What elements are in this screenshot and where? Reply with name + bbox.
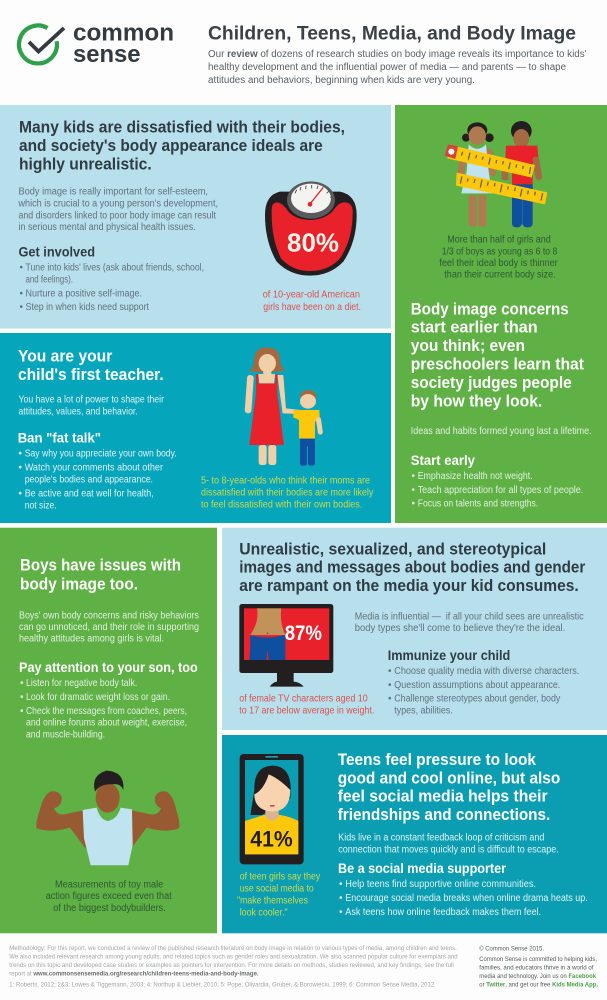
tips list xyxy=(20,263,204,313)
kids caption: than their current body size. xyxy=(444,270,556,281)
tips list: people's bodies and appearance. xyxy=(25,475,153,486)
methodology: 1: Roberts, 2012; 2&3: Lowes & Tiggemann, 2003; 4: Northup & Liebler, 2010; 5: Pope, Olivardia, Gruber, & Borowiecki, 1999; 6: Common Sense Media, 2012 xyxy=(9,981,435,988)
heading: Teens feel pressure to look xyxy=(338,750,536,769)
man caption: Measurements of toy male xyxy=(55,879,164,890)
heading: Body image concerns xyxy=(411,299,569,318)
tips list: • xyxy=(339,893,343,904)
subheading: immunize your child: Immunize your child xyxy=(388,647,510,663)
icon: TV with 87% xyxy=(239,604,333,687)
tips list: Listen for negative body talk. xyxy=(26,678,137,689)
body text: can go unnoticed, and their role in supporting xyxy=(19,622,199,633)
tips list xyxy=(412,471,583,510)
body text xyxy=(18,186,218,233)
TV caption: to 17 are below average in weight. xyxy=(239,705,374,716)
tips list: Nurture a positive self-image. xyxy=(26,288,142,299)
heading xyxy=(338,750,560,824)
body text: Media is influential — if all your child sees are unrealistic xyxy=(355,611,584,622)
heading: feel social media helps their xyxy=(338,787,548,806)
body text: Body image is really important for self-esteem, xyxy=(18,186,208,197)
tips list: • xyxy=(388,666,392,677)
heading: Unrealistic, sexualized, and stereotypical xyxy=(239,540,546,558)
tips list: not size. xyxy=(25,501,57,512)
icon: bathroom scale with 80%: 80% xyxy=(287,228,339,258)
tips list: • xyxy=(339,879,343,890)
heading: and society's body appearance ideals are xyxy=(19,137,323,155)
tips list: Be active and eat well for health, xyxy=(25,489,154,500)
panel: first teacher xyxy=(0,333,391,523)
methodology: report at www.commonsensemedia.org/research/children-teens-media-and-body-image. xyxy=(9,970,259,977)
tips list: • xyxy=(388,680,392,691)
subheading: pay attention: Pay attention to your son, too xyxy=(19,659,198,675)
scale caption xyxy=(263,290,361,313)
scale caption: girls have been on a diet. xyxy=(263,302,361,313)
TV caption xyxy=(239,694,374,716)
heading: start earlier than xyxy=(411,318,538,337)
mother and child caption xyxy=(201,475,373,510)
illustration: muscular man xyxy=(36,771,179,865)
body text xyxy=(19,610,199,645)
heading xyxy=(18,347,164,384)
heading xyxy=(239,540,586,595)
tips list: Check the messages from coaches, peers, xyxy=(26,706,187,717)
heading: images and messages about bodies and gender xyxy=(239,559,586,577)
tips list xyxy=(18,449,177,512)
tips list: Step in when kids need support xyxy=(26,302,149,313)
about Common Sense: Common Sense is committed to helping kids, xyxy=(479,956,597,963)
tips list: • xyxy=(20,678,24,689)
tips list: • xyxy=(20,692,24,703)
tips list: Challenge stereotypes about gender, body xyxy=(394,694,560,705)
body text xyxy=(338,832,559,855)
tips list xyxy=(388,666,579,717)
tips list: Look for dramatic weight loss or gain. xyxy=(26,692,170,703)
tips list xyxy=(339,879,588,918)
panel: unrealistic media images xyxy=(222,528,607,730)
heading xyxy=(411,299,584,410)
heading: you think; even xyxy=(411,336,525,355)
heading: by how they look. xyxy=(411,391,542,410)
heading: highly unrealistic. xyxy=(19,155,152,173)
panel: boys have issues xyxy=(0,528,217,933)
heading: Many kids are dissatisfied with their bodies, xyxy=(19,118,345,136)
scale caption: of 10-year-old American xyxy=(263,290,360,301)
panel: teens and social media xyxy=(222,735,607,933)
body text: healthy attitudes among girls is vital. xyxy=(19,634,164,645)
body text: and disorders linked to poor body image can result xyxy=(18,210,216,221)
heading: body image too. xyxy=(20,575,138,593)
intro text: Our review of dozens of research studies on body image reveals its importance to kids' xyxy=(208,49,587,60)
panel: many kids dissatisfied xyxy=(0,105,391,328)
icon: phone with 41%: 41% xyxy=(250,827,293,852)
title: Children, Teens, Media, and Body Image xyxy=(208,22,576,44)
mother and child caption: 5- to 8-year-olds who think their moms are xyxy=(201,475,370,486)
tips list: • xyxy=(20,288,24,299)
heading: Boys have issues with xyxy=(20,557,181,575)
kids caption: 1/3 of boys as young as 6 to 8 xyxy=(442,246,558,257)
kids caption: More than half of girls and xyxy=(447,234,551,245)
methodology: We also included relevant research among young adults, and related topics such as gender roles and sexualization. We also scanned popular culture for exemplars and xyxy=(9,954,458,960)
icon: bathroom scale with 80% xyxy=(265,181,357,276)
tips list: • xyxy=(388,694,392,705)
subheading: social media supporter: Be a social media supporter xyxy=(338,860,506,876)
icon: TV with 87%: 87% xyxy=(285,622,322,645)
phone caption: "make themselves xyxy=(237,896,308,907)
body text: Boys' own body concerns and risky behaviors xyxy=(19,610,199,621)
tips list: • xyxy=(412,471,416,482)
tips list: • xyxy=(412,485,416,496)
body text: body types she'll come to believe they're the ideal. xyxy=(355,623,565,634)
tips list: Help teens find supportive online communities. xyxy=(345,879,536,890)
body text: which is crucial to a young person's development, xyxy=(18,198,218,209)
tips list: Watch your comments about other xyxy=(25,463,164,474)
tips list: Focus on talents and strengths. xyxy=(418,499,538,510)
body text: Ideas and habits formed young last a lifetime. xyxy=(411,426,592,437)
tips list: and muscle-building. xyxy=(26,730,105,741)
tips list: Tune into kids' lives (ask about friends, school, xyxy=(26,263,204,274)
heading: You are your xyxy=(18,347,113,365)
tips list: Say why you appreciate your own body. xyxy=(25,449,177,460)
methodology: trends on this topic and developed case studies or examples as pointers for intervention. For more details on methods, studies reviewed, and key findings, see the full xyxy=(9,962,454,969)
kids caption xyxy=(439,234,558,281)
methodology xyxy=(9,945,458,988)
header xyxy=(19,20,587,86)
subheading: get involved: Get involved xyxy=(18,243,95,259)
tips list: types, abilities. xyxy=(394,706,453,717)
intro text xyxy=(208,49,587,86)
about Common Sense: media and technology. Join us on Facebook xyxy=(479,973,597,980)
man caption: of the biggest bodybuilders. xyxy=(53,903,166,914)
heading: preschoolers learn that xyxy=(411,354,584,373)
heading: friendships and connections. xyxy=(338,805,550,824)
about Common Sense xyxy=(479,946,598,989)
icon: phone with 41% xyxy=(240,754,304,864)
mother and child caption: to feel dissatisfied with their own bodies. xyxy=(201,499,362,510)
body text: Kids live in a constant feedback loop of criticism and xyxy=(338,832,544,843)
tips list: • xyxy=(18,449,22,460)
tips list: • xyxy=(18,463,22,474)
about Common Sense: families, and educators thrive in a world of xyxy=(479,965,594,972)
phone caption: use social media to xyxy=(240,884,314,895)
about Common Sense: © Common Sense 2015. xyxy=(479,946,544,953)
tips list: • xyxy=(412,499,416,510)
tips list: • xyxy=(20,706,24,717)
tips list: Teach appreciation for all types of people. xyxy=(418,485,583,496)
heading xyxy=(19,118,345,173)
phone caption: look cooler." xyxy=(240,907,288,918)
tips list: Question assumptions about appearance. xyxy=(394,680,560,691)
body text: You have a lot of power to shape their xyxy=(18,395,165,406)
TV caption: of female TV characters aged 10 xyxy=(239,694,368,705)
panel: body image concerns start early xyxy=(395,105,607,523)
tips list: and feelings). xyxy=(26,274,73,285)
tips list: • xyxy=(18,489,22,500)
body text: attitudes, values, and behavior. xyxy=(18,407,138,418)
tips list: • xyxy=(20,302,24,313)
kids caption: feel their ideal body is thinner xyxy=(439,258,558,269)
phone caption: of teen girls say they xyxy=(240,872,320,883)
man caption xyxy=(46,879,172,914)
heading xyxy=(20,557,181,593)
mother and child caption: dissatisfied with their bodies are more likely xyxy=(201,487,373,498)
heading: child's first teacher. xyxy=(18,366,164,384)
about Common Sense: or Twitter, and get our free Kids Media App. xyxy=(479,982,598,989)
phone caption xyxy=(237,872,320,918)
body text xyxy=(18,395,165,418)
man caption: action figures exceed even that xyxy=(46,891,172,902)
tips list: Choose quality media with diverse characters. xyxy=(394,666,579,677)
heading: good and cool online, but also xyxy=(338,768,560,787)
subheading: ban fat talk: Ban "fat talk" xyxy=(18,430,101,446)
body text xyxy=(355,611,584,634)
heading: society judges people xyxy=(411,373,572,392)
body text: in serious mental and physical health issues. xyxy=(18,222,196,233)
tips list: • xyxy=(20,263,24,274)
subheading: start early: Start early xyxy=(411,452,475,468)
logo: Common Sense: sense xyxy=(73,41,140,68)
illustration: girl and boy with measuring tapes xyxy=(445,121,547,227)
heading: are rampant on the media your kid consumes. xyxy=(239,577,579,595)
tips list: Ask teens how online feedback makes them feel. xyxy=(345,907,541,918)
footer xyxy=(9,945,598,989)
logo: Common Sense xyxy=(19,20,174,68)
logo: Common Sense: common xyxy=(73,20,174,47)
intro text: attitudes and behaviors, beginning when kids are very young. xyxy=(208,75,475,86)
intro text: healthy development and the influential power of media — and parents — to shape xyxy=(208,62,566,73)
tips list xyxy=(20,678,187,741)
tips list: and online forums about weight, exercise, xyxy=(26,718,187,729)
tips list: Emphasize health not weight. xyxy=(418,471,533,482)
methodology: Methodology: For this report, we conducted a review of the published research literature on body image in relation to various types of media, among children and teens. xyxy=(9,945,457,952)
tips list: • xyxy=(339,907,343,918)
illustration: mother and child xyxy=(245,347,323,466)
body text: connection that moves quickly and is difficult to escape. xyxy=(338,844,559,855)
